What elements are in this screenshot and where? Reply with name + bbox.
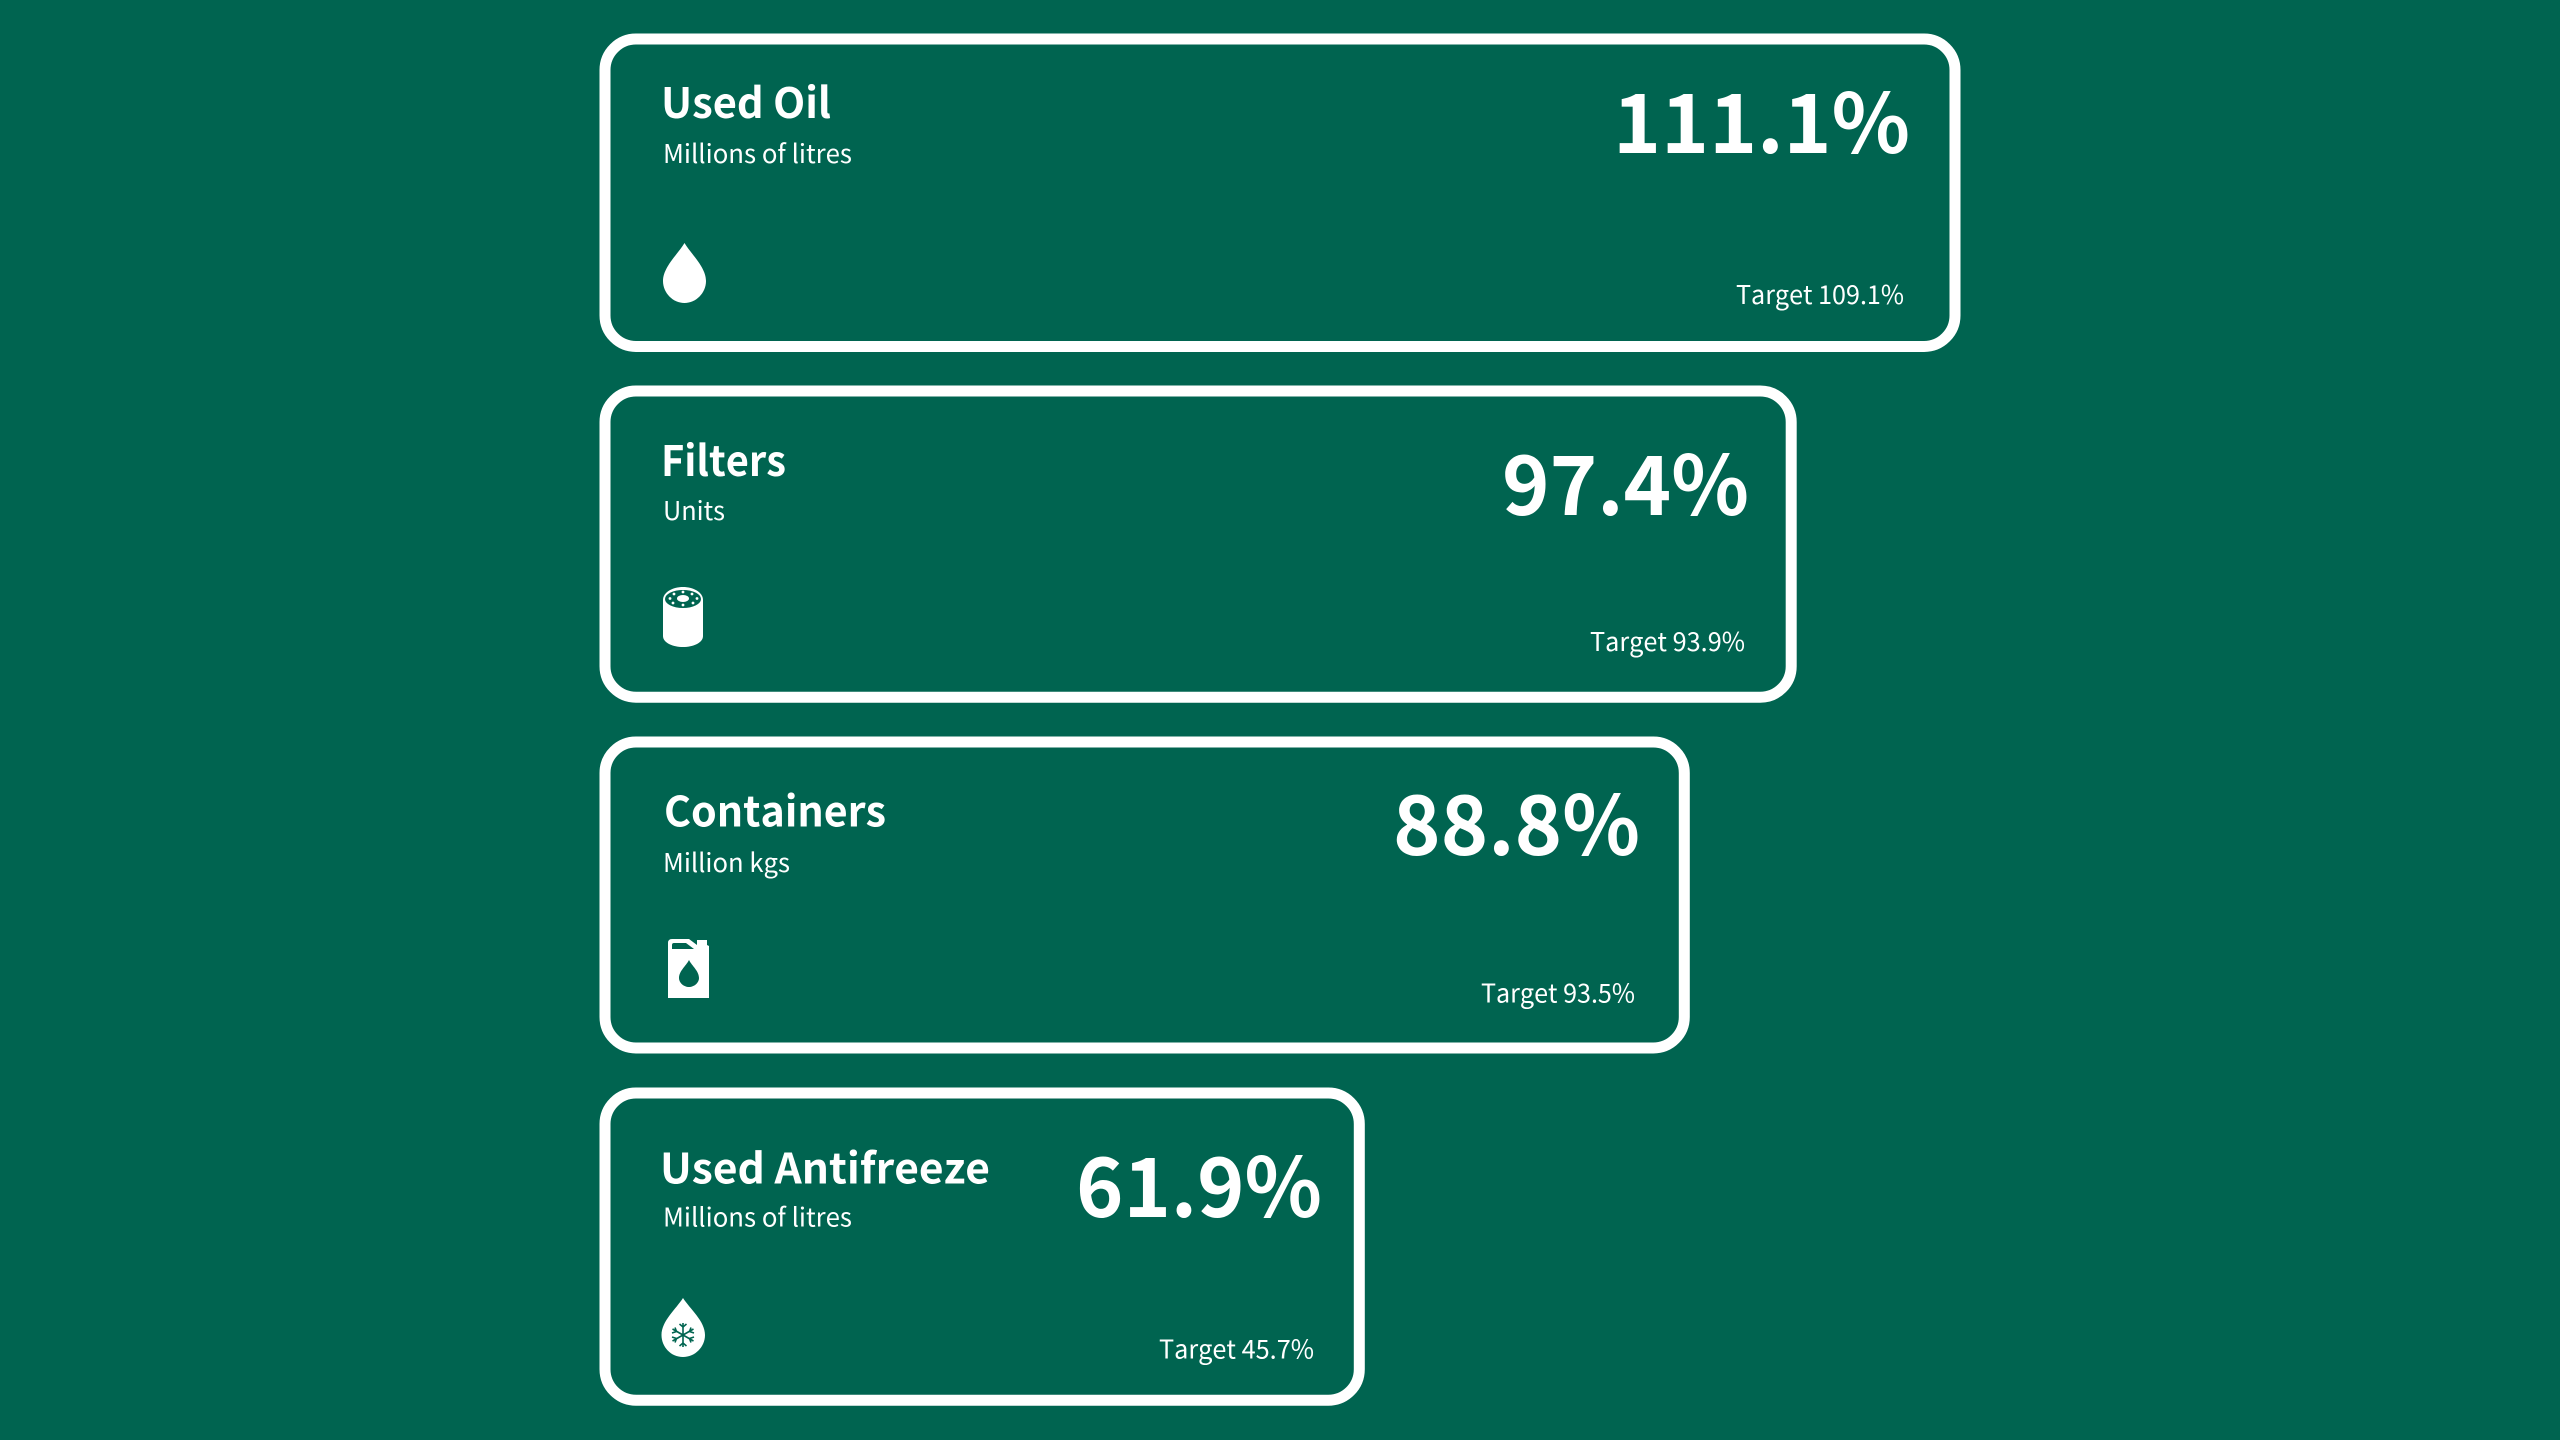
card border: filters xyxy=(605,391,1791,697)
target: filters: Target 93.9% xyxy=(1590,622,1745,659)
unit label: used oil: Millions of litres xyxy=(663,134,852,171)
percentage: filters: 97.4% xyxy=(1502,420,1749,539)
unit label: filters: Units xyxy=(663,491,725,528)
target: used antifreeze: Target 45.7% xyxy=(1159,1330,1314,1366)
icon: oil filter xyxy=(663,587,703,647)
heading: used antifreeze: Used Antifreeze xyxy=(660,1136,990,1196)
percentage: containers: 88.8% xyxy=(1393,760,1640,879)
heading: filters: Filters xyxy=(661,428,786,489)
panel: used antifreeze xyxy=(605,1093,1359,1400)
unit label: containers: Million kgs xyxy=(663,843,790,880)
unit label: used antifreeze: Millions of litres xyxy=(663,1198,852,1234)
card border: containers xyxy=(605,742,1684,1048)
heading: containers: Containers xyxy=(664,778,886,840)
target: containers: Target 93.5% xyxy=(1481,974,1635,1010)
icon: canister xyxy=(668,939,709,998)
percentage: used oil: 111.1% xyxy=(1613,58,1910,177)
icon: antifreeze drop xyxy=(662,1298,705,1357)
percentage: used antifreeze: 61.9% xyxy=(1076,1122,1322,1241)
card border: used antifreeze xyxy=(605,1093,1359,1400)
panel: containers xyxy=(605,742,1684,1048)
heading: used oil: Used Oil xyxy=(661,70,831,131)
panel: filters xyxy=(605,391,1791,697)
target: used oil: Target 109.1% xyxy=(1736,275,1904,312)
panel: used oil xyxy=(605,39,1955,346)
icon: oil drop xyxy=(663,243,706,303)
card border: used oil xyxy=(605,39,1955,346)
